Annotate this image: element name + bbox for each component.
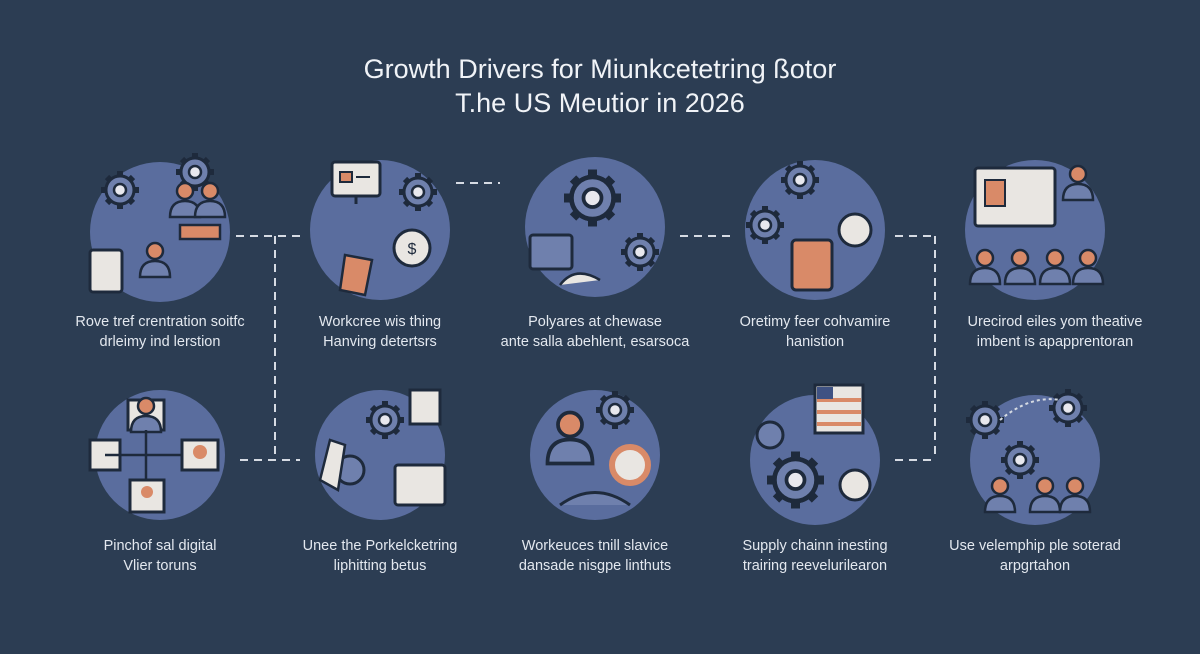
icon circle 5	[965, 160, 1105, 300]
label 1: drleimy ind lerstion	[100, 334, 220, 350]
label 8: dansade nisgpe linthuts	[519, 558, 671, 574]
label 8	[519, 538, 671, 574]
title: T.he US Meutior in 2026	[455, 88, 745, 118]
label 6: Vlier toruns	[123, 558, 197, 574]
label 10: arpgrtahon	[1000, 558, 1070, 574]
label 10: Use velemphip ple soterad	[949, 538, 1121, 554]
label 9: Supply chainn inesting	[742, 538, 888, 554]
title	[364, 54, 836, 118]
label 1	[75, 314, 245, 350]
title: Growth Drivers for Miunkcetetring ßotor	[364, 54, 836, 84]
icon circle 8	[530, 390, 660, 520]
label 4	[740, 314, 890, 350]
icon circle 3	[525, 157, 665, 297]
label 3: Polyares at chewase	[528, 314, 662, 330]
label 8: Workeuces tnill slavice	[522, 538, 668, 554]
connectors	[236, 183, 935, 460]
label 6: Pinchof sal digital	[104, 538, 216, 554]
icon circle 9	[750, 385, 880, 525]
label 7: liphitting betus	[334, 558, 426, 574]
label 5: imbent is apapprentoran	[977, 334, 1133, 350]
label 5: Urecirod eiles yom theative	[968, 314, 1142, 330]
icon circle 10	[966, 389, 1100, 525]
label 2: Workcree wis thing	[319, 314, 441, 330]
label 2	[319, 314, 441, 350]
label 7	[303, 538, 457, 574]
icon circle 7	[315, 390, 445, 520]
label 1: Rove tref crentration soitfc	[75, 314, 245, 330]
label 5	[968, 314, 1142, 350]
icon circle 2: $	[408, 241, 417, 258]
label 6	[104, 538, 216, 574]
label 3	[501, 314, 690, 350]
icon circle 6	[90, 390, 225, 520]
label 7: Unee the Porkelcketring	[303, 538, 457, 554]
label 4: Oretimy feer cohvamire	[740, 314, 890, 330]
label 4: hanistion	[786, 334, 844, 350]
label 2: Hanving detertsrs	[323, 334, 437, 350]
label 10	[949, 538, 1121, 574]
label 9: trairing reevelurilearon	[743, 558, 887, 574]
icon circle 2	[310, 160, 450, 300]
label 3: ante salla abehlent, esarsoca	[501, 334, 689, 350]
label 9	[742, 538, 888, 574]
icon circle 4	[745, 160, 885, 300]
icon circle 1	[90, 153, 230, 302]
